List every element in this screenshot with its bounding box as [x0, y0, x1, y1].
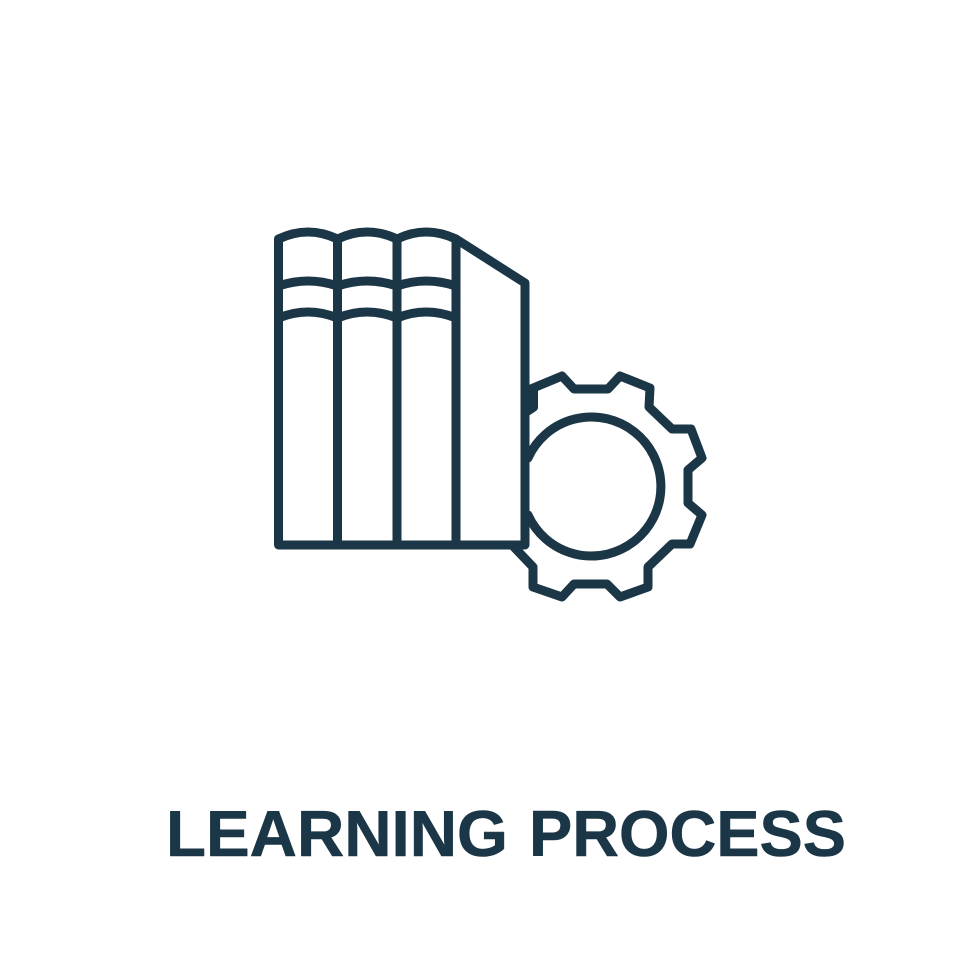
- title: [166, 797, 846, 870]
- icon: books and gear: [278, 232, 702, 597]
- title: PROCESS: [529, 797, 846, 870]
- title: LEARNING: [166, 797, 508, 870]
- icon: books: [278, 232, 525, 545]
- icon: gear: [513, 376, 702, 597]
